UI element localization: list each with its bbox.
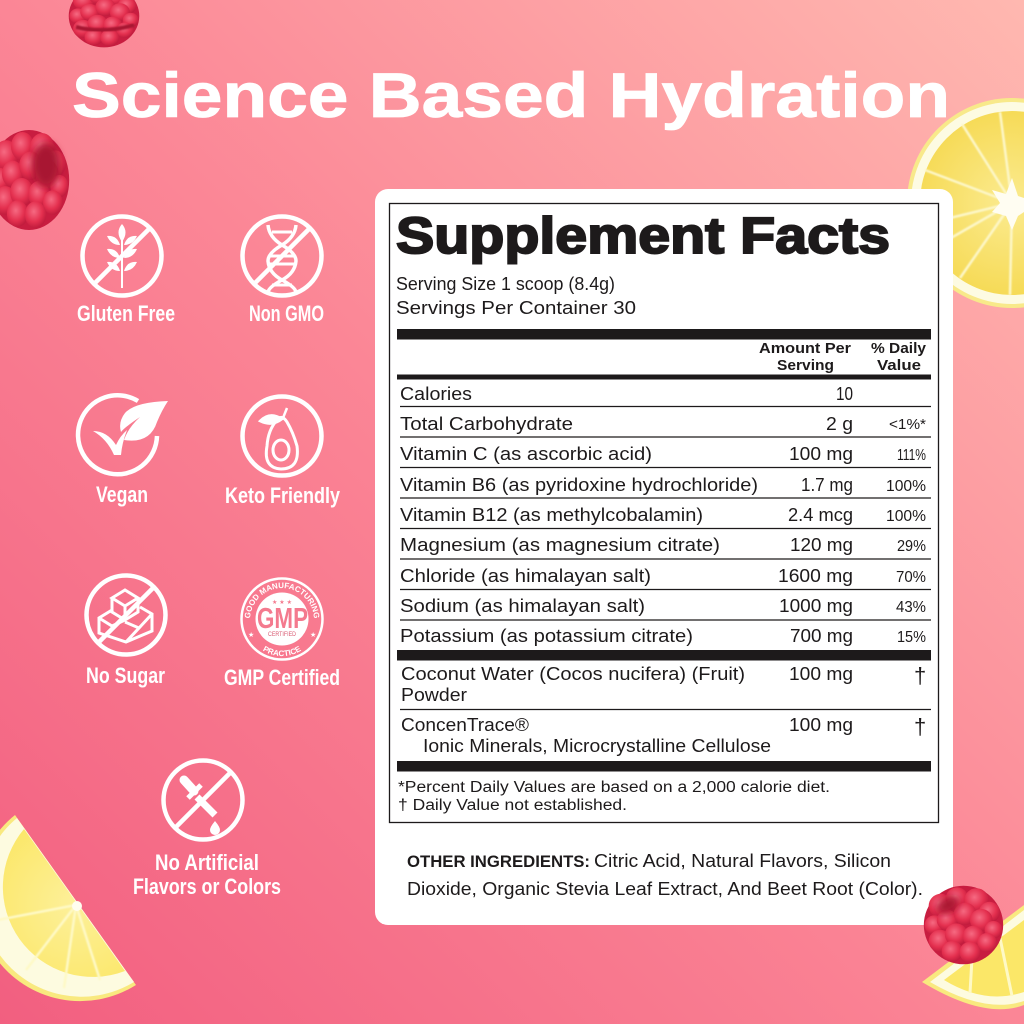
nutrient rows: Magnesium (as magnesium citrate) [400,535,720,555]
other ingredients [407,851,923,899]
nutrient rows: 1000 mg [779,596,853,616]
heading: supplement facts: Supplement Facts [396,207,890,264]
serving information: Serving Size 1 scoop (8.4g) [396,274,615,294]
nutrient rows: Calories [400,384,472,404]
table header: Serving [777,358,834,374]
icon: gmp certified seal: CERTIFIED [268,632,297,638]
other active ingredients: † [914,663,926,688]
nutrient rows: 70% [896,569,926,586]
nutrient rows: Chloride (as himalayan salt) [400,566,651,586]
icon: gmp certified seal: PRACTICE [263,646,302,656]
other active ingredients: Powder [401,685,467,705]
nutrient rows: Total Carbohydrate [400,414,573,434]
decorative raspberry: bottom right [924,886,1003,964]
nutrient rows: 1600 mg [778,566,853,586]
label: gmp certified: GMP Certified [224,665,340,690]
icon: non gmo [242,216,322,296]
other ingredients: Citric Acid, Natural Flavors, Silicon [594,851,891,871]
nutrient rows: 111% [897,447,926,464]
other active ingredients: 100 mg [789,715,853,735]
nutrient rows: 100% [886,508,926,525]
footnotes: *Percent Daily Values are based on a 2,000 calorie diet. [398,779,830,796]
other active ingredients: Coconut Water (Cocos nucifera) (Fruit) [401,664,745,684]
nutrient rows: Vitamin B12 (as methylcobalamin) [400,505,703,525]
nutrient rows [400,384,931,646]
panel: supplement facts card [375,189,953,925]
table header [397,329,931,380]
icon: vegan [78,395,168,474]
icon: keto friendly avocado [242,396,322,476]
nutrient rows: 1.7 mg [801,475,853,495]
page title: Science Based Hydration [72,61,950,131]
icon grid: dietary claims [76,214,341,899]
label: no artificial flavors or colors: Flavors or Colors [133,874,281,899]
icon: gmp certified seal: ★★★ [272,599,292,606]
label: no artificial flavors or colors [133,850,281,899]
nutrient rows: 2.4 mcg [788,505,853,525]
label: vegan: Vegan [96,482,148,507]
table header: Amount Per [759,341,851,357]
serving information: Servings Per Container 30 [396,298,636,318]
other ingredients: Dioxide, Organic Stevia Leaf Extract, And Beet Root (Color). [407,879,923,899]
label: keto friendly: Keto Friendly [225,483,341,508]
decorative raspberry: top [69,0,139,47]
table header: % Daily [871,341,926,357]
other active ingredients [397,650,931,772]
icon: no sugar [86,576,166,654]
other active ingredients: Ionic Minerals, Microcrystalline Cellulose [423,736,771,756]
footnotes: † Daily Value not established. [398,797,627,814]
nutrient rows: 100% [886,478,926,495]
other active ingredients: † [914,714,926,739]
label: non gmo: Non GMO [249,301,324,326]
other active ingredients: ConcenTrace® [401,715,529,735]
nutrient rows: Sodium (as himalayan salt) [400,596,645,616]
decorative lemon slice: top right [907,98,1024,308]
icon: no artificial flavors [164,760,242,840]
label: gluten free: Gluten Free [77,301,175,326]
decorative lemon wedge: bottom left [0,815,136,1001]
icon: gmp certified seal: GMP [257,603,308,635]
nutrient rows: Vitamin C (as ascorbic acid) [400,444,652,464]
icon: gluten free [82,216,162,296]
other ingredients: OTHER INGREDIENTS: [407,852,590,871]
icon: gmp certified seal: ★ [310,631,316,639]
icon: gmp certified seal: GOOD MANUFACTURING [244,582,320,618]
nutrient rows: Vitamin B6 (as pyridoxine hydrochloride) [400,475,758,495]
icon: gmp certified seal [240,577,324,661]
serving information [396,274,636,318]
nutrient rows: 29% [897,538,926,555]
other active ingredients: 100 mg [789,664,853,684]
nutrient rows: <1%* [889,416,926,433]
label: no artificial flavors or colors: No Artificial [155,850,259,875]
decorative lemon wedge: bottom right [922,905,1024,1009]
label: no sugar: No Sugar [86,663,165,688]
nutrient rows: 100 mg [789,444,853,464]
nutrient rows: Potassium (as potassium citrate) [400,626,693,646]
decorative raspberry: left [0,130,69,230]
nutrient rows: 700 mg [790,626,853,646]
nutrient rows: 120 mg [790,535,853,555]
nutrient rows: 43% [896,599,926,616]
table header: Value [877,358,921,374]
footnotes [398,779,830,814]
nutrient rows: 10 [836,384,853,404]
nutrient rows: 15% [897,629,926,646]
icon: gmp certified seal: ★ [248,631,254,639]
nutrient rows: 2 g [826,414,853,434]
